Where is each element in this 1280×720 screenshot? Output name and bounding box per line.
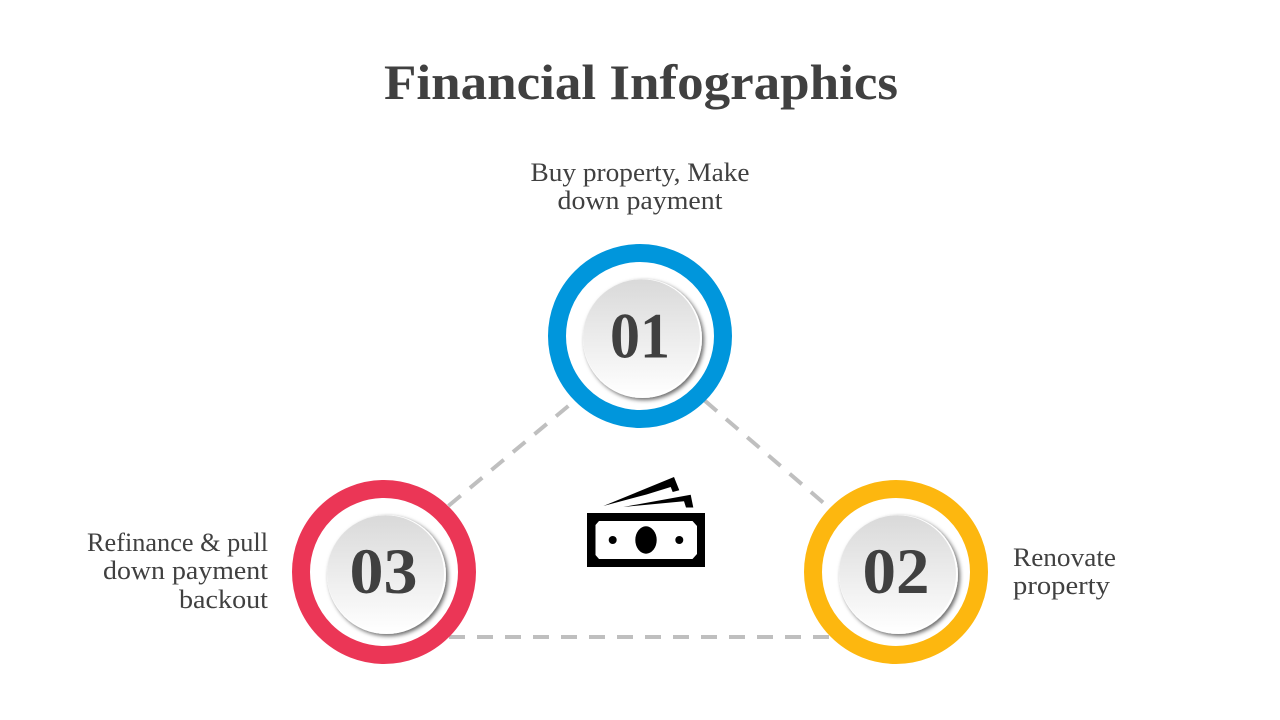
step 1 text [530, 158, 750, 215]
step 1 circle [557, 253, 723, 419]
icon: money [587, 477, 705, 567]
step 3 circle: 03 [350, 536, 418, 608]
step 2 text: property [1013, 571, 1110, 600]
step 3 text [87, 528, 269, 614]
step 2 text: Renovate [1013, 543, 1116, 572]
step 2 text [1013, 543, 1116, 600]
step 3 circle [301, 489, 467, 655]
dashed connectors [448, 401, 829, 637]
step 2 circle: 02 [862, 536, 930, 608]
step 1 text: Buy property, Make [530, 158, 750, 187]
step 3 text: Refinance & pull [87, 528, 268, 557]
title: Financial Infographics [384, 54, 898, 110]
step 1 text: down payment [558, 186, 723, 215]
step 3 text: backout [179, 585, 269, 614]
step 3 text: down payment [103, 556, 269, 585]
step 2 circle [813, 489, 979, 655]
step 1 circle: 01 [610, 300, 670, 372]
